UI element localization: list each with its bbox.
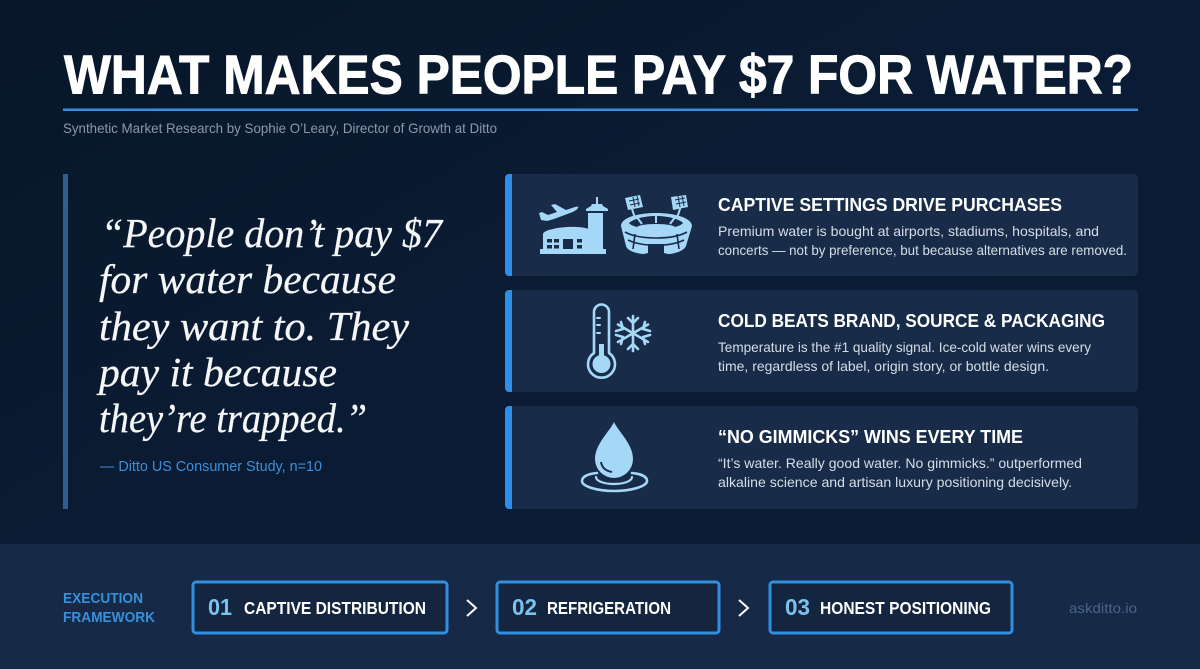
icon: airport: [539, 197, 608, 254]
step 03: HONEST POSITIONING: [820, 598, 991, 618]
arrow: [467, 600, 476, 616]
icon: thermometer: [588, 305, 615, 378]
step 03: 03: [785, 594, 810, 620]
card body: concerts — not by preference, but because alternatives are removed.: [718, 243, 1127, 258]
quote text: they want to. They: [99, 303, 410, 349]
quote text: pay it because: [96, 349, 337, 395]
title underline: [63, 108, 1138, 111]
step 02: [497, 582, 719, 633]
icon: stadium: [621, 195, 692, 254]
subtitle: Synthetic Market Research by Sophie O’Leary, Director of Growth at Ditto: [63, 120, 497, 136]
panel: cold beats brand: [505, 290, 1138, 392]
quote attribution: — Ditto US Consumer Study, n=10: [100, 459, 322, 475]
card body: alkaline science and artisan luxury positioning decisively.: [718, 475, 1072, 490]
quote text: they’re trapped.”: [99, 395, 367, 441]
icon: snowflake: [616, 316, 650, 351]
step 01: [193, 582, 447, 633]
card heading: COLD BEATS BRAND, SOURCE & PACKAGING: [718, 310, 1105, 331]
icon: water drop: [582, 422, 647, 491]
quote text: for water because: [99, 256, 396, 302]
footer band: [0, 544, 1200, 669]
arrow: [739, 600, 748, 616]
card body: time, regardless of label, origin story, or bottle design.: [718, 359, 1049, 374]
card body: [718, 456, 1082, 490]
quote text: “People don’t pay $7: [101, 210, 443, 256]
quote accent bar: [63, 174, 68, 509]
step 02: 02: [512, 594, 537, 620]
quote text: [96, 210, 443, 441]
footer label: [63, 591, 155, 626]
step 03: [770, 582, 1012, 633]
card body: [718, 224, 1127, 258]
card heading: “NO GIMMICKS” WINS EVERY TIME: [718, 426, 1023, 447]
step 02: REFRIGERATION: [547, 598, 671, 618]
step 01: 01: [208, 594, 232, 620]
panel: captive settings: [505, 174, 1138, 276]
card body: “It’s water. Really good water. No gimmicks.” outperformed: [718, 456, 1082, 471]
card body: Temperature is the #1 quality signal. Ice-cold water wins every: [718, 340, 1091, 355]
footer label: EXECUTION: [63, 591, 143, 607]
card heading: CAPTIVE SETTINGS DRIVE PURCHASES: [718, 194, 1062, 215]
quote panel: [63, 174, 443, 509]
panel: no gimmicks: [505, 406, 1138, 509]
card body: Premium water is bought at airports, stadiums, hospitals, and: [718, 224, 1099, 239]
footer label: FRAMEWORK: [63, 610, 155, 626]
card body: [718, 340, 1091, 374]
website: askditto.io: [1069, 600, 1137, 616]
step 01: CAPTIVE DISTRIBUTION: [244, 598, 426, 618]
